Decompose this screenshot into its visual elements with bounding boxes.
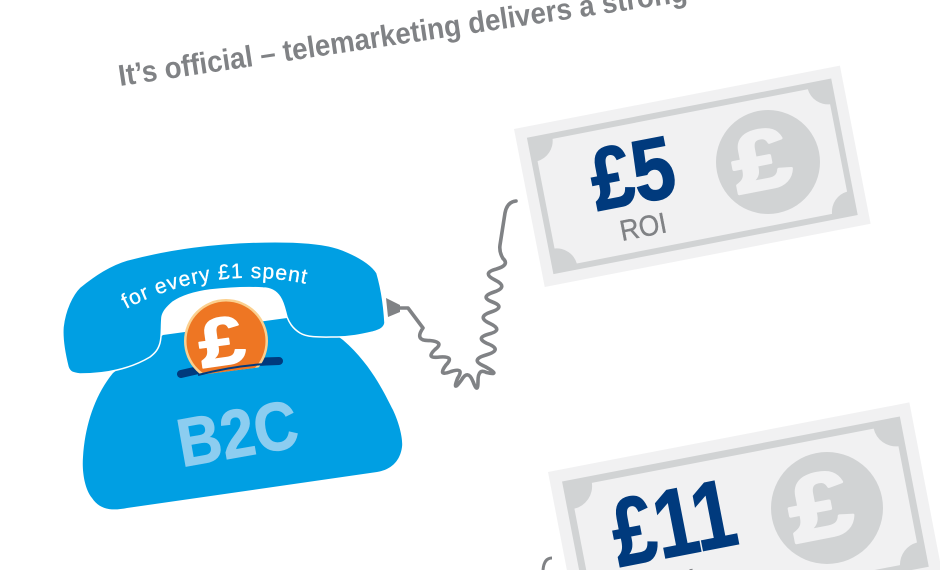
label: ROI: ROI: [617, 207, 669, 248]
slot lip: [198, 364, 266, 375]
handset: [63, 242, 385, 374]
telephone: B2C: [64, 242, 402, 510]
B2C label: B2C: [171, 386, 304, 482]
icon: pound medallion: £: [779, 450, 861, 563]
amount: £5: £5: [582, 116, 683, 230]
icon: pound medallion: [771, 450, 883, 564]
handset caption: [126, 278, 316, 309]
telephone: B2C: for every £1 spent: [121, 264, 308, 308]
phone cord: B2C: [386, 201, 516, 388]
phone body: [83, 318, 402, 509]
phone cord: second phone: [543, 558, 552, 570]
banknote: £11 ROI: [548, 402, 940, 570]
banknote: £5 ROI: [514, 66, 871, 287]
coin: £: [194, 301, 250, 383]
slot: [181, 361, 279, 374]
icon: pound medallion: £: [723, 108, 798, 212]
icon: pound medallion: [716, 108, 820, 214]
coin: [184, 299, 268, 374]
